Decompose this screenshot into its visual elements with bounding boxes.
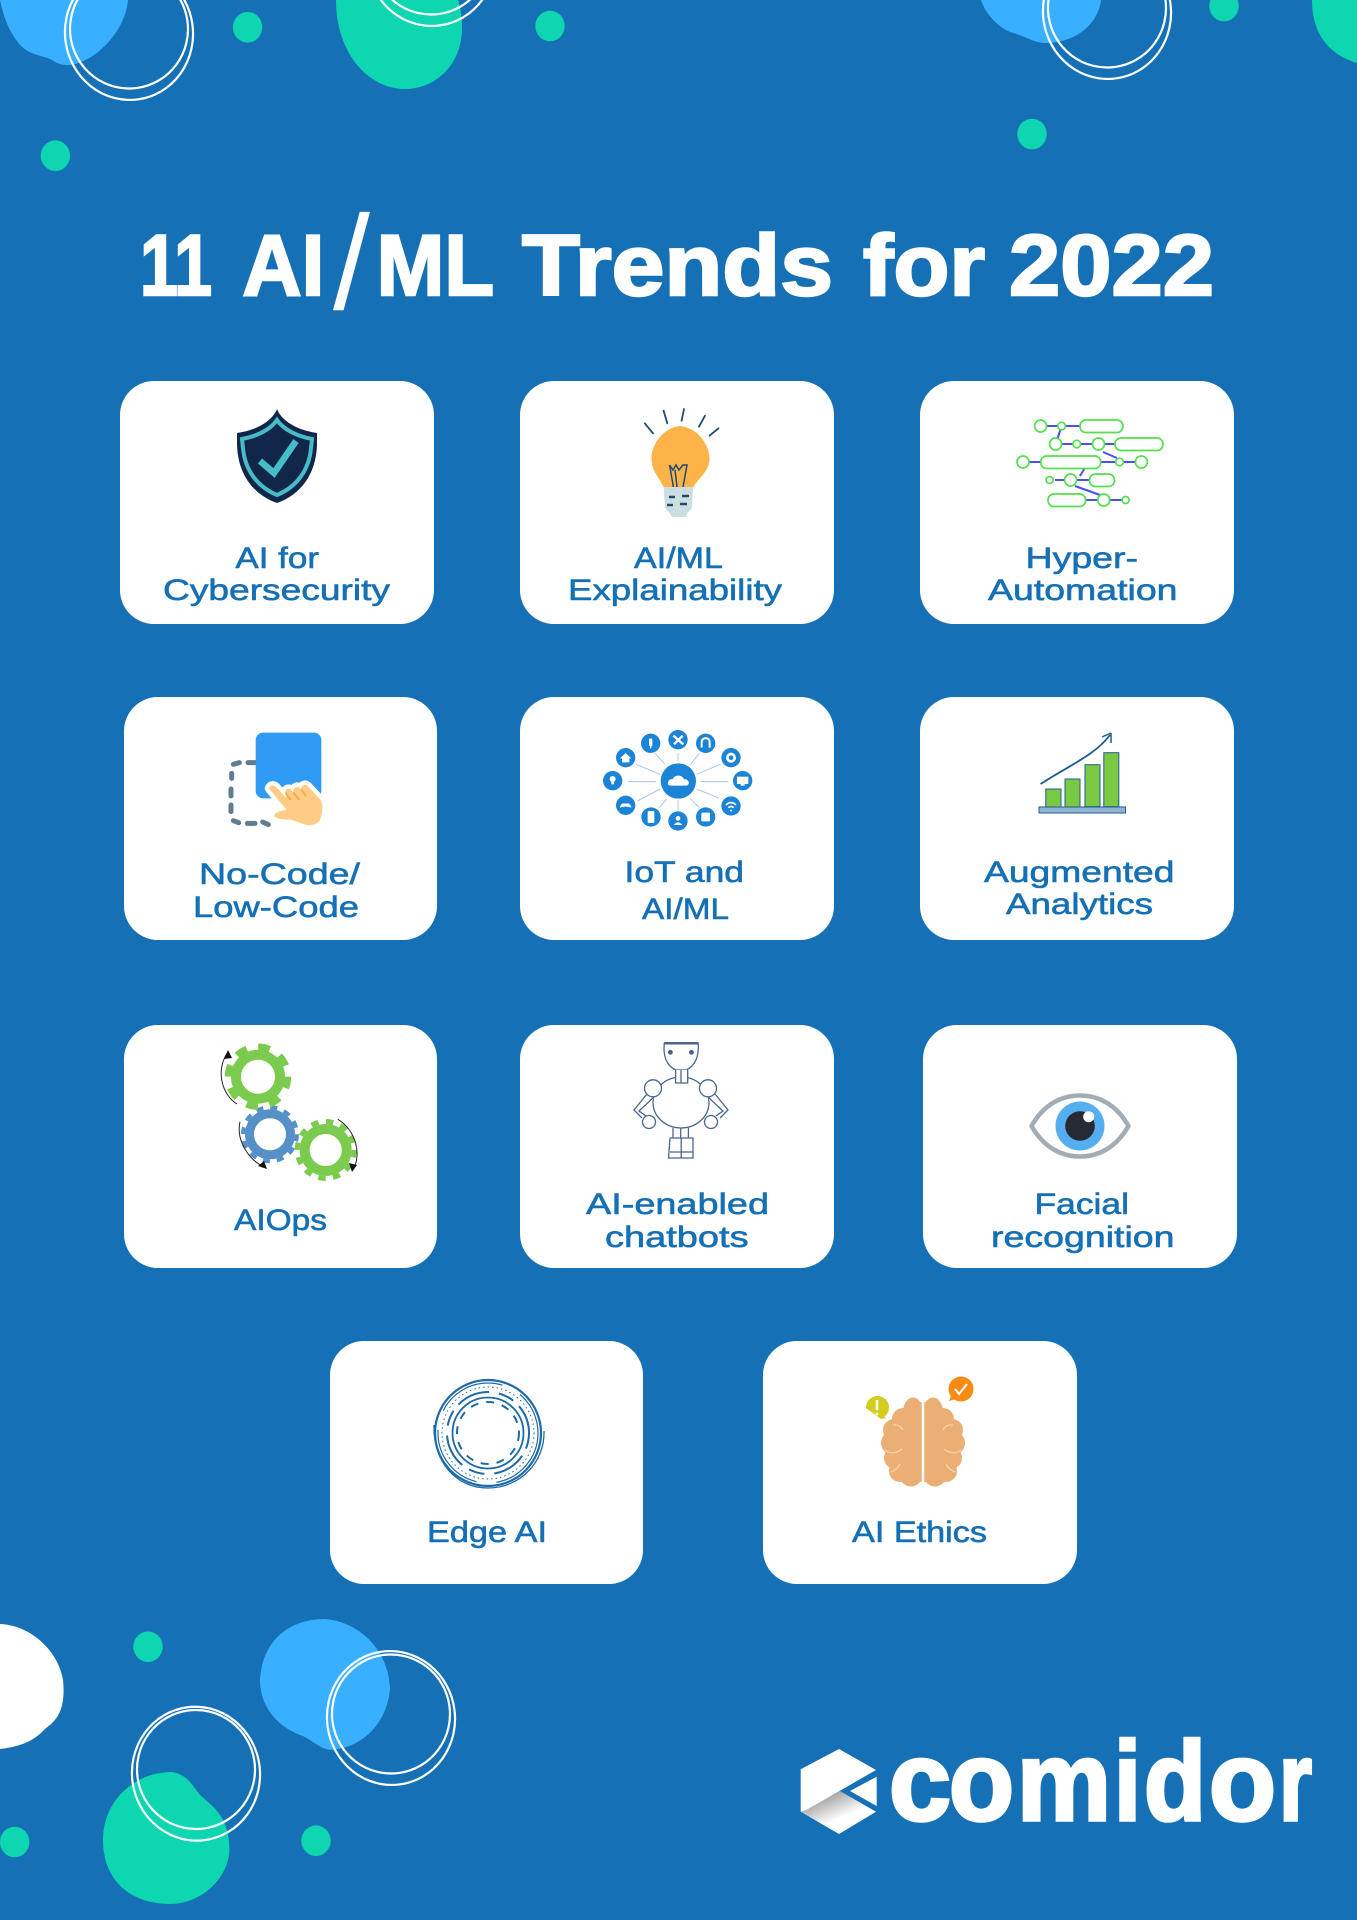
card: AI Ethics [763,1341,1077,1584]
decorative rings: bottom [123,1643,464,1849]
title: / [333,189,371,338]
icon: gears [221,1047,357,1178]
icon: light bulb [645,409,718,517]
logo wordmark: o [1209,1719,1276,1844]
card: Edge AI [330,1341,643,1584]
label: AI for Cybersecurity [163,542,390,607]
label: Facial recognition: recognition [991,1221,1174,1254]
icon: drag hand [231,733,322,825]
label: Hyper-Automation: Hyper- [1026,542,1138,575]
logo: comidor [801,1719,1312,1844]
icon: shield with check [237,409,317,503]
label: IoT and AI/ML [624,856,744,926]
label: AI for Cybersecurity: Cybersecurity [163,574,390,607]
card: No-Code/Low-Code [124,697,437,940]
decorative rings: top [56,0,1180,108]
title: for [863,218,985,314]
title: ML [377,218,493,314]
logo wordmark: i [1114,1719,1141,1844]
title: Trends [522,218,833,314]
label: No-Code/Low-Code [193,858,361,924]
card: AI for Cybersecurity [120,381,434,624]
label: No-Code/Low-Code: Low-Code [193,891,359,924]
label: AI for Cybersecurity: AI for [235,542,319,575]
icon: automation flow [1017,420,1163,506]
label: Facial recognition [991,1188,1174,1254]
card: AI/ML Explainability [520,381,834,624]
label: Augmented Analytics [984,856,1174,921]
logo wordmark: o [949,1719,1014,1844]
card: AI-enabled chatbots [520,1025,834,1268]
icon: concentric rings [434,1380,544,1488]
label: IoT and AI/ML: IoT and [624,856,744,889]
icon: growth bar chart [1039,733,1126,813]
card: AIOps [124,1025,437,1268]
logo wordmark: r [1279,1719,1312,1844]
decorative blobs: bottom [0,1619,390,1904]
logo wordmark: m [1017,1719,1111,1844]
icon: eye [1032,1096,1128,1156]
icon: brain with speech bubbles [866,1376,974,1487]
label: Hyper-Automation: Automation [988,574,1178,607]
decorative blobs: top [0,0,1357,171]
label: AIOps: AIOps [234,1204,327,1237]
logo mark [801,1749,877,1834]
logo wordmark: d [1144,1719,1206,1844]
card: Augmented Analytics [920,697,1234,940]
label: No-Code/Low-Code: No-Code/ [199,858,361,891]
label: AI/ML Explainability: AI/ML [634,542,723,575]
label: IoT and AI/ML: AI/ML [642,893,729,926]
label: Facial recognition: Facial [1034,1188,1129,1221]
icon: IoT cloud network [603,730,752,831]
logo wordmark: c [889,1719,951,1844]
title: AI [242,218,324,314]
label: AI-enabled chatbots [586,1188,769,1254]
icon: robot [634,1043,728,1158]
label: Edge AI: Edge AI [427,1516,547,1549]
card: Facial recognition [923,1025,1237,1268]
label: AI/ML Explainability [568,542,782,607]
label: AI-enabled chatbots: chatbots [605,1221,749,1254]
card: Hyper-Automation [920,381,1234,624]
label: AI-enabled chatbots: AI-enabled [586,1188,769,1221]
title: 2022 [1009,218,1214,314]
label: Hyper-Automation [988,542,1178,607]
label: AI Ethics: AI Ethics [852,1516,987,1549]
label: Augmented Analytics: Augmented [984,856,1174,889]
card: IoT and AI/ML [520,697,834,940]
label: Augmented Analytics: Analytics [1006,888,1153,921]
title: 11 [140,218,212,314]
label: AI/ML Explainability: Explainability [568,574,782,607]
